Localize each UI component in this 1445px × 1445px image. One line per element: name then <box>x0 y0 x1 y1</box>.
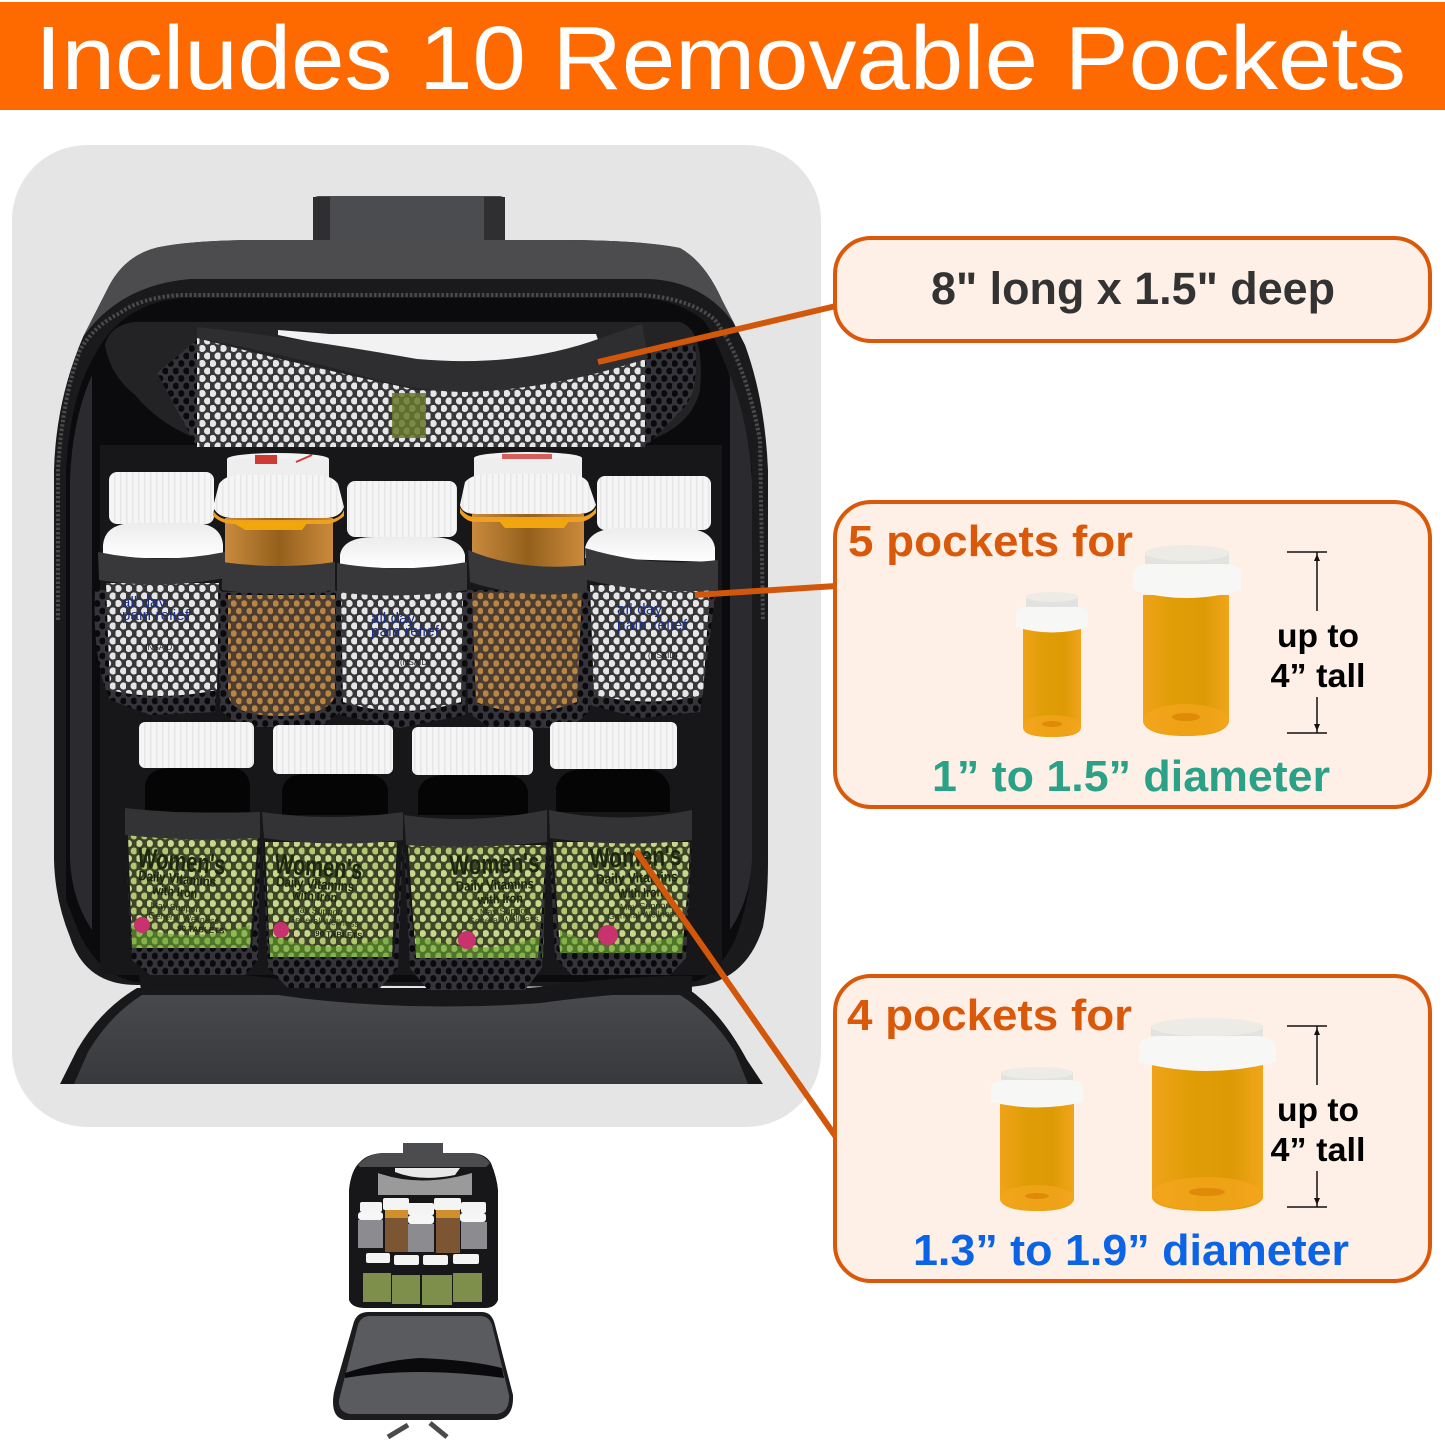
leader line: upper pockets <box>695 586 836 595</box>
lid top fabric <box>83 240 735 337</box>
callout: 5 pockets <box>835 502 1430 807</box>
top row: white bottle 3: (NSAID) <box>648 651 678 660</box>
bottom row: vitamin bottle 2 <box>262 725 403 988</box>
zipper <box>58 295 763 620</box>
small vial <box>1016 592 1088 737</box>
bottom row: vitamin bottle 1: Daily Vitamins <box>138 867 217 890</box>
bottom row: vitamin bottle 1: Women's <box>136 842 227 881</box>
height dimension: 4” tall <box>1270 1131 1366 1168</box>
bottom row: vitamin bottle 2: with Iron <box>291 887 338 905</box>
heading: 5 pockets for <box>848 517 1133 566</box>
bottom row: vitamin bottle 4: Women's <box>589 840 682 874</box>
open pill bag illustration <box>54 196 768 1084</box>
leader line: lower pockets <box>636 851 836 1137</box>
title banner: Includes 10 Removable Pockets <box>35 9 1406 109</box>
top row: white bottle 2 <box>335 481 468 728</box>
bottom row: vitamin bottle 2: May Support <box>292 904 344 918</box>
top row: white bottle 3: pain relief <box>617 617 688 634</box>
bottom row: vitamin bottle 4: May Support <box>620 900 672 912</box>
height dimension <box>1270 552 1366 733</box>
bottom row: vitamin bottle 2: 90 TABLETS <box>315 929 363 941</box>
bottom row: vitamin bottle 4 <box>549 722 692 975</box>
flap lining <box>60 980 763 1084</box>
bottom row: vitamin bottle 2: General Wellness <box>288 914 360 929</box>
diameter label: 1” to 1.5” diameter <box>932 752 1330 801</box>
bottom row: vitamin bottle 1: 90 TABLETS <box>177 924 225 936</box>
height dimension <box>1270 1026 1366 1207</box>
bottom row: vitamin bottle 4: General Wellness <box>608 909 679 921</box>
top row: amber vial 1 <box>213 453 344 727</box>
top row: white bottle 1: all day <box>122 594 166 611</box>
heading: 4 pockets for <box>847 991 1132 1040</box>
callout: 4 pockets <box>835 976 1430 1281</box>
top row: white bottle 2: pain relief <box>371 623 440 640</box>
bottom row: vitamin bottle 4: With Iron <box>618 884 663 901</box>
bottom row: vitamin bottle 1: May Support <box>150 900 202 914</box>
top row: white bottle 1: pain relief <box>122 607 190 624</box>
top row: white bottle 3 <box>585 476 718 718</box>
handle <box>313 196 505 242</box>
height dimension: 4” tall <box>1270 657 1366 694</box>
height dimension: up to <box>1277 1091 1359 1128</box>
top row: white bottle 1 <box>95 472 225 715</box>
top row: white bottle 1: (NSAID) <box>145 643 175 652</box>
small wide vial <box>991 1067 1083 1211</box>
callout: top pocket dimensions <box>835 238 1430 341</box>
bottom row: vitamin bottle 3: Daily Vitamins <box>456 875 534 894</box>
top mesh pocket <box>105 322 701 447</box>
bottom row: vitamin bottle 1 <box>125 722 260 975</box>
leader line: top pocket <box>598 306 836 362</box>
callout: top pocket dimensions: 8" long x 1.5" deep <box>931 263 1335 314</box>
bottom row: vitamin bottle 4: Daily Vitamins <box>596 868 678 887</box>
large wide vial <box>1139 1018 1276 1211</box>
bottom row: vitamin bottle 3: with Iron <box>477 890 523 907</box>
large vial <box>1133 545 1241 736</box>
bottom row: vitamin bottle 2: Daily Vitamins <box>276 873 355 894</box>
small full bag thumbnail <box>333 1143 513 1437</box>
bottom row: vitamin bottle 1: General Wellness <box>148 910 220 926</box>
bottom row: vitamin bottle 3 <box>404 727 547 990</box>
interior <box>66 298 752 982</box>
bottom row: vitamin bottle 3: General Wellness <box>468 914 539 926</box>
panel: product photo background <box>12 145 821 1127</box>
height dimension: up to <box>1277 617 1359 654</box>
bottom row: vitamin bottle 3: Women's <box>449 847 540 881</box>
top row: white bottle 3: all day <box>617 601 662 618</box>
bag body <box>54 240 768 987</box>
bottom row: vitamin bottle 3: May Support <box>480 905 532 917</box>
bottom row: vitamin bottle 2: Women's <box>274 848 364 885</box>
top row: white bottle 2: (NSAID) <box>400 658 430 667</box>
bottom row: vitamin bottle 1: with Iron <box>151 882 198 901</box>
top row: amber vial 2 <box>460 452 596 728</box>
diameter label: 1.3” to 1.9” diameter <box>913 1226 1349 1275</box>
top row: white bottle 2: all day <box>371 610 416 627</box>
